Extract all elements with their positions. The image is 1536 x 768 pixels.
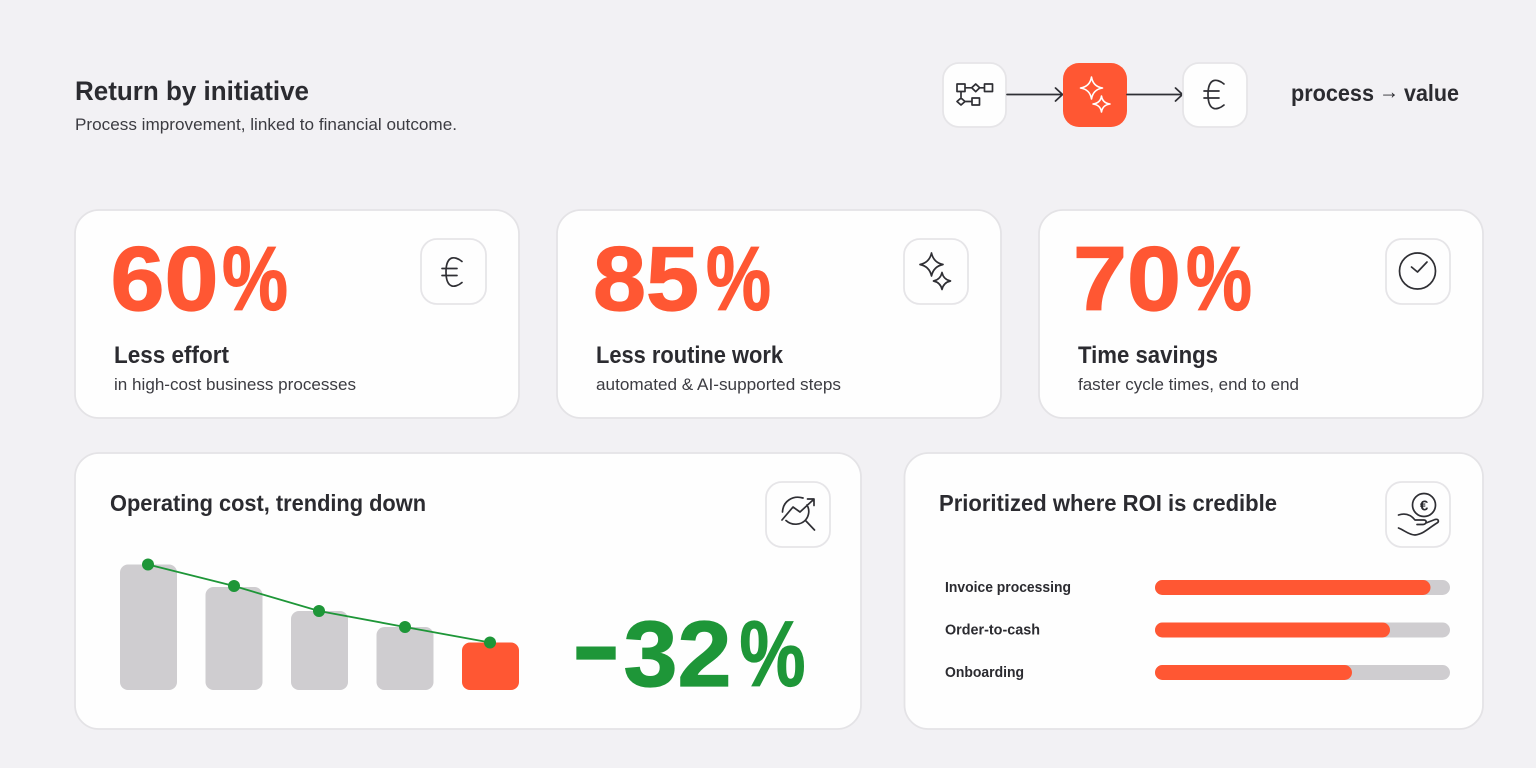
bar chart with trend line xyxy=(120,558,519,690)
arrow: process to AI xyxy=(1007,88,1062,101)
row: order-to-cash: Order-to-cash xyxy=(945,622,1040,638)
stat: 60%: 60 xyxy=(110,229,218,330)
stat: 60% xyxy=(110,229,288,330)
panel: time savings xyxy=(1039,210,1483,418)
stat: -32% xyxy=(574,600,806,706)
label: Less routine work xyxy=(596,342,784,369)
panel: prioritized ROI xyxy=(904,453,1483,729)
stat: 60%: % xyxy=(222,229,288,330)
arrow: AI to value xyxy=(1127,88,1182,101)
icon: euro xyxy=(1183,63,1247,127)
icon: AI sparkles xyxy=(1063,63,1127,127)
icon: process flow xyxy=(943,63,1006,127)
panel: less effort xyxy=(75,210,519,418)
flow label: value xyxy=(1404,80,1459,106)
row: order-to-cash xyxy=(945,622,1450,638)
stat: 85%: 85 xyxy=(593,229,699,330)
stat: -32%: − xyxy=(574,600,618,704)
stat: 70%: 70 xyxy=(1073,229,1181,330)
row: onboarding: Onboarding xyxy=(945,665,1024,681)
process to value flow xyxy=(943,63,1459,127)
icon: hand with euro coin xyxy=(1386,482,1450,547)
panel: operating cost xyxy=(75,453,861,729)
flow label xyxy=(1291,80,1459,106)
row: onboarding xyxy=(945,665,1450,681)
stat: 70%: % xyxy=(1186,229,1252,330)
subtitle: Process improvement, linked to financial outcome. xyxy=(75,115,457,134)
label: Less effort xyxy=(114,342,229,369)
label: Time savings xyxy=(1078,342,1218,369)
title: Return by initiative xyxy=(75,76,309,106)
description: in high-cost business processes xyxy=(114,375,356,394)
stat: 85% xyxy=(593,229,771,330)
icon: euro xyxy=(421,239,486,304)
stat: -32%: 32 xyxy=(624,602,732,706)
stat: 70% xyxy=(1073,229,1252,330)
flow label: process xyxy=(1291,80,1374,106)
icon: hand with euro coin: € xyxy=(1420,498,1429,514)
description: faster cycle times, end to end xyxy=(1078,375,1299,394)
heading: Operating cost, trending down xyxy=(110,490,426,516)
description: automated & AI-supported steps xyxy=(596,375,841,394)
icon: chart with magnifier xyxy=(766,482,830,547)
header xyxy=(75,76,457,134)
panel: less routine work xyxy=(557,210,1001,418)
row: invoice processing: Invoice processing xyxy=(945,580,1071,596)
stat: -32%: % xyxy=(740,602,806,706)
heading: Prioritized where ROI is credible xyxy=(939,490,1277,516)
icon: clock check xyxy=(1386,239,1450,304)
flow label: → xyxy=(1379,82,1399,104)
stat: 85%: % xyxy=(706,229,771,330)
icon: sparkles xyxy=(904,239,968,304)
row: invoice processing xyxy=(945,580,1450,596)
